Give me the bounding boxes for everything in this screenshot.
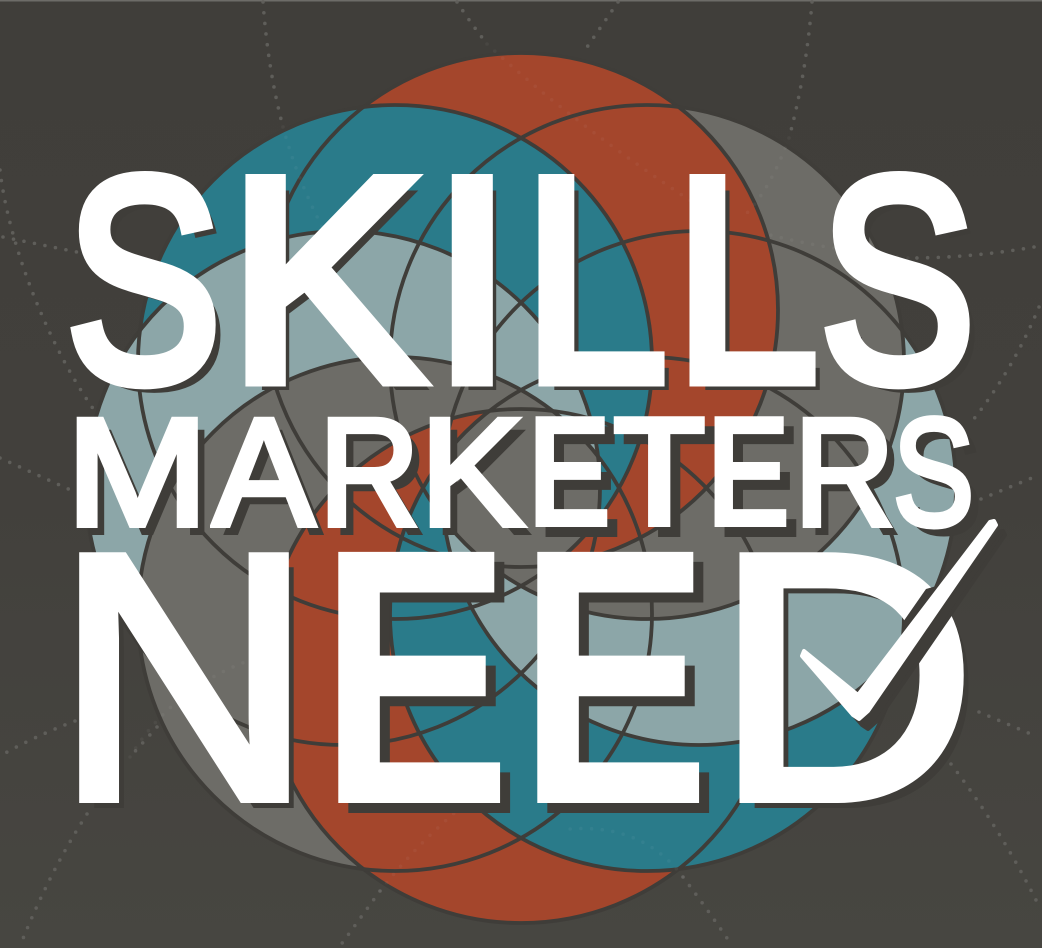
title: NEED: D (714, 482, 975, 873)
title: SKILLS: S (820, 118, 975, 442)
title: MARKETERS: S (893, 386, 974, 558)
title: NEED: N (55, 482, 313, 873)
title: MARKETERS: R (794, 386, 895, 558)
title: SKILLS (66, 118, 975, 442)
title: NEED: E (319, 474, 511, 881)
title: SKILLS: L (674, 118, 818, 442)
title: MARKETERS: T (612, 382, 706, 562)
title: SKILLS: K (228, 118, 423, 442)
title: MARKETERS: E (527, 382, 613, 562)
title: SKILLS: I (431, 118, 514, 442)
title: MARKETERS: K (420, 386, 524, 558)
title: SKILLS: L (522, 118, 667, 442)
title: MARKETERS: A (213, 386, 314, 558)
title: SKILLS: S (66, 118, 221, 442)
rosette of eight overlapping circles (86, 44, 956, 923)
title: MARKETERS: R (319, 386, 420, 558)
title: NEED: E (518, 474, 710, 881)
title: MARKETERS (66, 382, 974, 562)
title: MARKETERS: M (66, 386, 209, 558)
title: MARKETERS: E (706, 382, 792, 562)
